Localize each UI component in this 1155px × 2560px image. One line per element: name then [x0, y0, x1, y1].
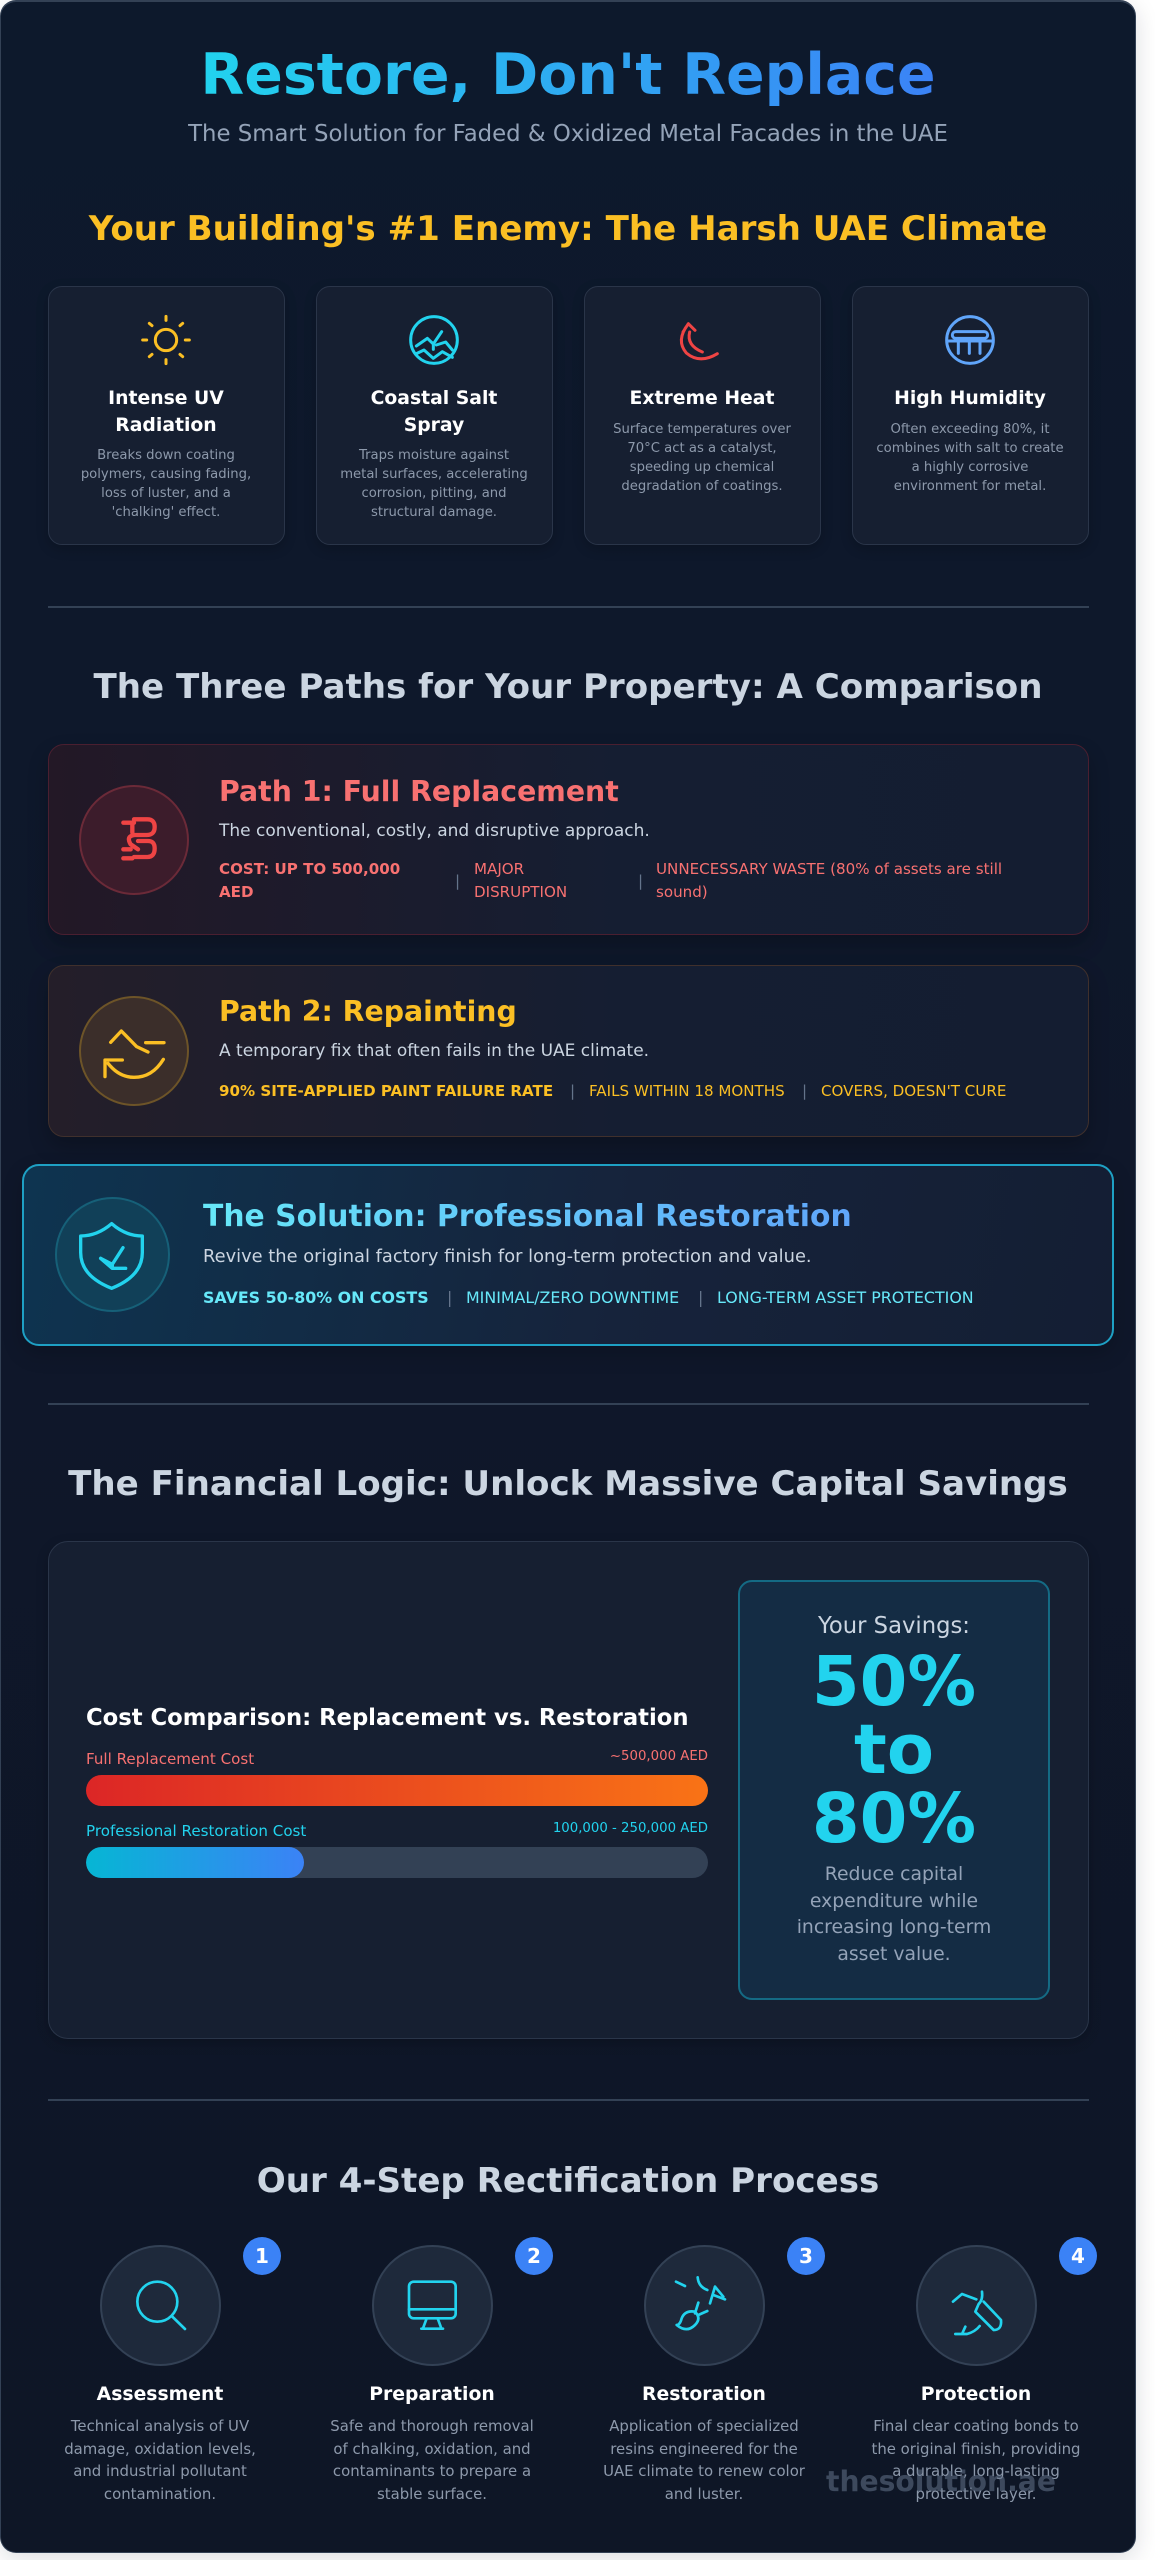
step text: and luster.	[665, 2485, 743, 2503]
card title: Coastal Salt	[371, 388, 497, 409]
card text: Often exceeding 80%, it	[890, 422, 1050, 437]
path stats: |	[455, 872, 460, 890]
bar: restoration fill	[86, 1847, 304, 1878]
solution stats: LONG-TERM ASSET PROTECTION	[717, 1288, 974, 1307]
savings note	[797, 1864, 991, 1964]
panel: extreme heat	[584, 286, 820, 545]
panel: financial	[48, 1541, 1088, 2039]
panel: the solution	[22, 1164, 1114, 1346]
solution stats	[203, 1288, 974, 1307]
icon circle: monitor	[372, 2245, 493, 2366]
card text: structural damage.	[371, 505, 497, 520]
step text: Safe and thorough removal	[330, 2417, 534, 2435]
card text: corrosion, pitting, and	[361, 486, 507, 501]
solution description: Revive the original factory finish for long-term protection and value.	[203, 1246, 812, 1267]
panel: coastal salt spray	[316, 286, 552, 545]
step title: Preparation	[369, 2384, 495, 2405]
watermark: thesolution.ae	[826, 2465, 1056, 2498]
step text: contamination.	[104, 2485, 216, 2503]
path stats: |	[638, 872, 643, 890]
title: Restore, Don't Replace	[200, 42, 936, 108]
card text: environment for metal.	[894, 479, 1046, 494]
step text	[64, 2417, 256, 2503]
step text: of chalking, oxidation, and	[333, 2440, 531, 2458]
bar label: restoration: Professional Restoration Cost	[86, 1822, 306, 1840]
path stats: 90% SITE-APPLIED PAINT FAILURE RATE	[219, 1082, 553, 1100]
card title: Intense UV	[108, 388, 224, 409]
card text: combines with salt to create	[876, 441, 1064, 456]
step text	[330, 2417, 534, 2503]
icon: humidity	[945, 315, 995, 365]
icon: heat	[680, 322, 719, 360]
badge 2: 2	[527, 2244, 541, 2268]
icon circle: coating tool	[916, 2245, 1037, 2366]
card text: degradation of coatings.	[621, 479, 783, 494]
card text: 'chalking' effect.	[112, 505, 220, 520]
card text: speeding up chemical	[630, 460, 774, 475]
card text: Surface temperatures over	[613, 422, 791, 437]
path stats: MAJOR	[474, 860, 524, 878]
heading: financial logic: The Financial Logic: Unlock Massive Capital Savings	[68, 1464, 1068, 1504]
path stats: |	[570, 1082, 575, 1100]
card text: polymers, causing fading,	[81, 467, 251, 482]
badge 1	[243, 2237, 281, 2275]
path stats: COST: UP TO 500,000	[219, 860, 400, 878]
step text: the original finish, providing	[872, 2440, 1080, 2458]
step 2 preparation	[330, 2237, 553, 2503]
heading: process: Our 4-Step Rectification Process	[257, 2161, 879, 2201]
step text: Application of specialized	[609, 2417, 799, 2435]
path description: A temporary fix that often fails in the UAE climate.	[219, 1041, 649, 1061]
panel: intense UV	[48, 286, 284, 545]
icon: replacement squiggle	[79, 785, 189, 895]
card text: Traps moisture against	[359, 448, 509, 463]
card text: 70°C act as a catalyst,	[627, 441, 777, 456]
card title	[371, 388, 497, 436]
path stats: FAILS WITHIN 18 MONTHS	[589, 1082, 785, 1100]
icon: repaint cycle	[79, 996, 189, 1106]
savings note: increasing long-term	[797, 1917, 991, 1938]
card text: Breaks down coating	[97, 448, 235, 463]
card title	[108, 388, 224, 436]
path stats: COVERS, DOESN'T CURE	[821, 1082, 1006, 1100]
panel: path 2 repainting	[48, 965, 1088, 1137]
card text: a highly corrosive	[912, 460, 1028, 475]
step 4 protection	[872, 2237, 1097, 2503]
heading: three paths: The Three Paths for Your Property: A Comparison	[94, 667, 1042, 707]
step text: damage, oxidation levels,	[64, 2440, 256, 2458]
solution title: The Solution: Professional Restoration	[203, 1199, 852, 1234]
subtitle: The Smart Solution for Faded & Oxidized Metal Facades in the UAE	[188, 121, 948, 147]
card title: Spray	[404, 415, 464, 436]
callout: savings	[738, 1580, 1050, 2000]
step title: Restoration	[642, 2384, 766, 2405]
card text	[613, 422, 791, 494]
icon circle: magnifier	[100, 2245, 221, 2366]
solution stats: SAVES 50-80% ON COSTS	[203, 1288, 429, 1307]
step text: Final clear coating bonds to	[873, 2417, 1079, 2435]
card text: loss of luster, and a	[101, 486, 231, 501]
icon circle: brush	[644, 2245, 765, 2366]
savings figure: 80%	[812, 1779, 976, 1859]
path title: Path 2: Repainting	[219, 995, 517, 1028]
step text: and industrial pollutant	[73, 2462, 247, 2480]
heading: climate: Your Building's #1 Enemy: The Harsh UAE Climate	[89, 209, 1047, 249]
path stats	[219, 860, 1002, 901]
card title: Extreme Heat	[630, 388, 774, 409]
badge 4	[1059, 2237, 1097, 2275]
step text: UAE climate to renew color	[603, 2462, 805, 2480]
bar value: replacement: ~500,000 AED	[610, 1749, 708, 1764]
solution stats: |	[698, 1288, 703, 1307]
bar label: replacement: Full Replacement Cost	[86, 1750, 254, 1768]
card text: metal surfaces, accelerating	[340, 467, 528, 482]
bar value: restoration: 100,000 - 250,000 AED	[553, 1821, 708, 1836]
step text	[603, 2417, 805, 2503]
solution stats: |	[447, 1288, 452, 1307]
step 3 restoration	[603, 2237, 825, 2503]
savings note: expenditure while	[810, 1890, 978, 1912]
icon: sun	[141, 314, 191, 366]
path stats: DISRUPTION	[474, 883, 567, 901]
step text: stable surface.	[377, 2485, 487, 2503]
savings figure: 50%	[812, 1642, 976, 1722]
savings note: Reduce capital	[825, 1864, 963, 1885]
bar: replacement	[86, 1775, 708, 1806]
solution stats: MINIMAL/ZERO DOWNTIME	[466, 1288, 679, 1307]
chart: cost comparison	[86, 1705, 708, 1878]
path stats: |	[802, 1082, 807, 1100]
card text	[81, 448, 251, 520]
badge 3: 3	[799, 2244, 813, 2268]
savings figure: to	[854, 1710, 934, 1790]
step title: Assessment	[97, 2384, 223, 2405]
path stats	[219, 1082, 1006, 1100]
step text: Technical analysis of UV	[71, 2417, 249, 2435]
icon: salt waves	[409, 315, 459, 365]
step text: a durable, long-lasting	[892, 2462, 1060, 2480]
panel: high humidity	[852, 286, 1088, 545]
badge 2	[515, 2237, 553, 2275]
savings label: Your Savings:	[818, 1613, 970, 1639]
icon: shield check	[55, 1197, 170, 1312]
card text	[876, 422, 1064, 494]
card text	[340, 448, 528, 520]
step title: Protection	[921, 2384, 1031, 2405]
card title: High Humidity	[894, 388, 1046, 409]
card title: Radiation	[115, 415, 217, 436]
step text: resins engineered for the	[610, 2440, 798, 2458]
bar: restoration track	[86, 1847, 708, 1878]
path title: Path 1: Full Replacement	[219, 775, 619, 808]
panel: path 1 full replacement	[48, 744, 1088, 935]
step text: protective layer.	[916, 2485, 1036, 2503]
badge 4: 4	[1071, 2244, 1085, 2268]
badge 1: 1	[255, 2244, 269, 2268]
path stats: sound)	[656, 883, 708, 901]
step 1 assessment	[64, 2237, 281, 2503]
step text	[872, 2417, 1080, 2503]
path stats: AED	[219, 883, 254, 901]
savings figure	[812, 1642, 976, 1859]
path description: The conventional, costly, and disruptive approach.	[219, 821, 650, 841]
badge 3	[787, 2237, 825, 2275]
savings note: asset value.	[837, 1944, 951, 1964]
path stats: UNNECESSARY WASTE (80% of assets are still	[656, 860, 1002, 878]
chart title: Cost Comparison: Replacement vs. Restoration	[86, 1705, 688, 1731]
step text: contaminants to prepare a	[333, 2462, 531, 2480]
